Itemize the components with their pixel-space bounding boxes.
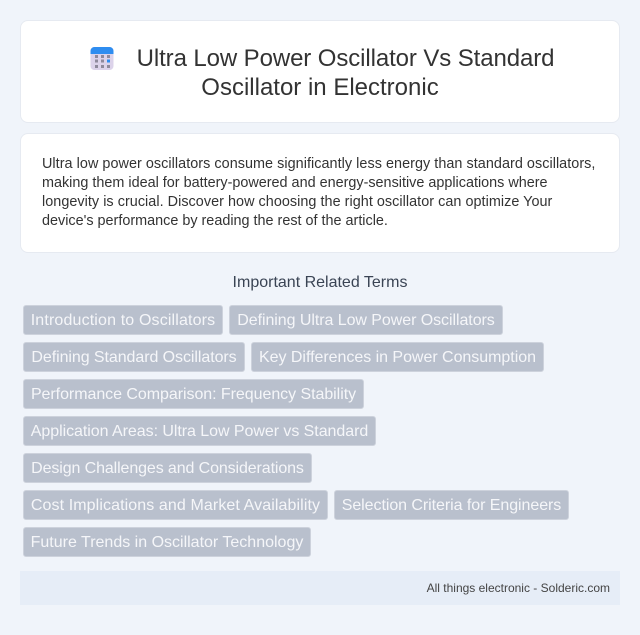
tag list: [23, 305, 569, 557]
tag: Application Areas: Ultra Low Power vs Standard: [31, 423, 368, 440]
icon: calendar: [90, 47, 114, 70]
footer: All things electronic - Solderic.com: [427, 581, 610, 595]
tag: Future Trends in Oscillator Technology: [31, 534, 303, 551]
tag: [23, 379, 364, 409]
tag: [251, 342, 544, 372]
intro text: device's performance by reading the rest of the article.: [42, 213, 388, 229]
tag: [23, 490, 328, 520]
tag: [23, 305, 223, 335]
tag: Design Challenges and Considerations: [31, 460, 304, 477]
intro card: [20, 133, 620, 253]
intro text: longevity is crucial. Discover how choosing the right oscillator can optimize Your: [42, 194, 552, 210]
related terms heading: Important Related Terms: [233, 274, 407, 291]
tag: [334, 490, 569, 520]
tag: [23, 453, 312, 483]
header card: [20, 20, 620, 123]
tag: [23, 527, 311, 557]
footer: [20, 571, 620, 605]
tag: Defining Ultra Low Power Oscillators: [237, 312, 495, 329]
tag: Introduction to Oscillators: [31, 312, 215, 329]
tag: Selection Criteria for Engineers: [342, 497, 561, 514]
title: [137, 45, 554, 101]
tag: Key Differences in Power Consumption: [259, 349, 536, 366]
title: Oscillator in Electronic: [201, 74, 439, 101]
tag: [23, 416, 376, 446]
intro text: [42, 156, 595, 229]
intro text: making them ideal for battery-powered and energy-sensitive applications where: [42, 175, 548, 191]
tag: Performance Comparison: Frequency Stability: [31, 386, 356, 403]
tag: [229, 305, 503, 335]
title: Ultra Low Power Oscillator Vs Standard: [137, 45, 554, 72]
tag: Cost Implications and Market Availability: [31, 497, 320, 514]
intro text: Ultra low power oscillators consume significantly less energy than standard oscillators,: [42, 156, 595, 172]
tag: [23, 342, 245, 372]
tag: Defining Standard Oscillators: [31, 349, 237, 366]
